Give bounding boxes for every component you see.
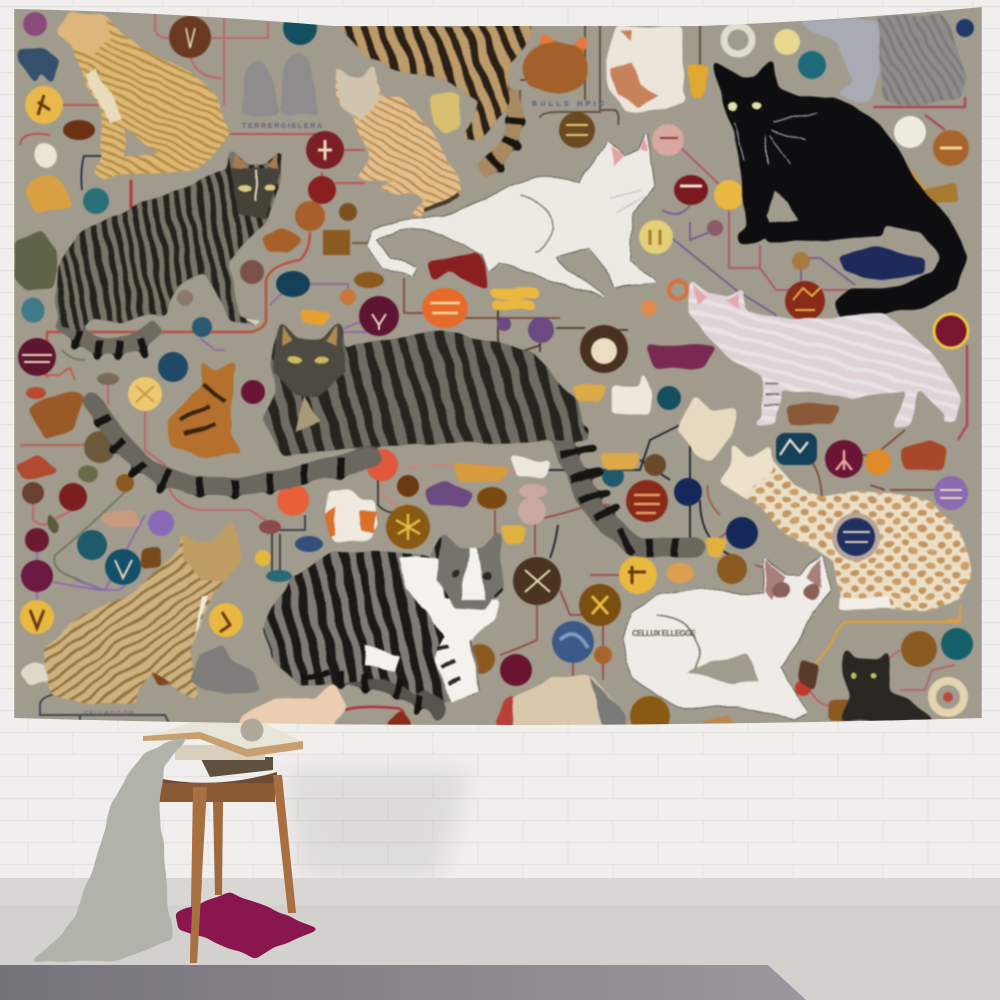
- cat: white lower: [622, 553, 832, 720]
- cat: dark tabby: [55, 148, 283, 362]
- cat: black and white tabby: [263, 530, 502, 715]
- connector lines: [20, 10, 967, 725]
- label: top left caption: TERRERGIELERA: [242, 123, 322, 130]
- cat head: small cream: [677, 395, 735, 462]
- cat: white lying: [367, 128, 657, 300]
- baseboard: [0, 878, 1000, 905]
- cat: small orange: [167, 360, 243, 457]
- cat: white and orange: [607, 26, 687, 110]
- small figures: [15, 48, 960, 725]
- wall shadow: [285, 770, 470, 878]
- cat: small pink: [239, 684, 347, 724]
- rug: [0, 965, 806, 1000]
- cat: orange blob: [522, 32, 588, 93]
- leopard badge: [832, 513, 880, 561]
- cat: black: [713, 57, 967, 317]
- blanket: [28, 735, 187, 962]
- label: bulls: BULLS HPIC: [532, 101, 604, 108]
- books: [143, 718, 303, 777]
- tapestry: [14, 5, 982, 736]
- badges: [18, 11, 974, 736]
- cat: small white orange: [325, 488, 380, 543]
- cat: small grey: [190, 645, 260, 694]
- cat: striped top centre: [337, 26, 532, 172]
- cat: calico: [495, 674, 626, 725]
- floor: [0, 905, 1000, 1000]
- cat: grey top right: [797, 13, 965, 105]
- badge marks: [22, 28, 962, 648]
- cat: sitting orange: [335, 65, 460, 222]
- cat: tan top left: [57, 13, 230, 180]
- stool: [157, 772, 296, 963]
- cat: big tabby with long tail: [92, 322, 695, 558]
- cat: leopard: [718, 442, 972, 610]
- label: cellux: CELLUX ELLEGGE: [632, 629, 697, 638]
- label: bottom caption: FELLEGGOR: [84, 711, 134, 718]
- stool front leg over pillow: [190, 880, 202, 963]
- cat: pink fluffy: [688, 280, 962, 428]
- cat: small black: [840, 647, 935, 722]
- cat: ginger tabby: [20, 520, 242, 703]
- pillow: [175, 892, 320, 958]
